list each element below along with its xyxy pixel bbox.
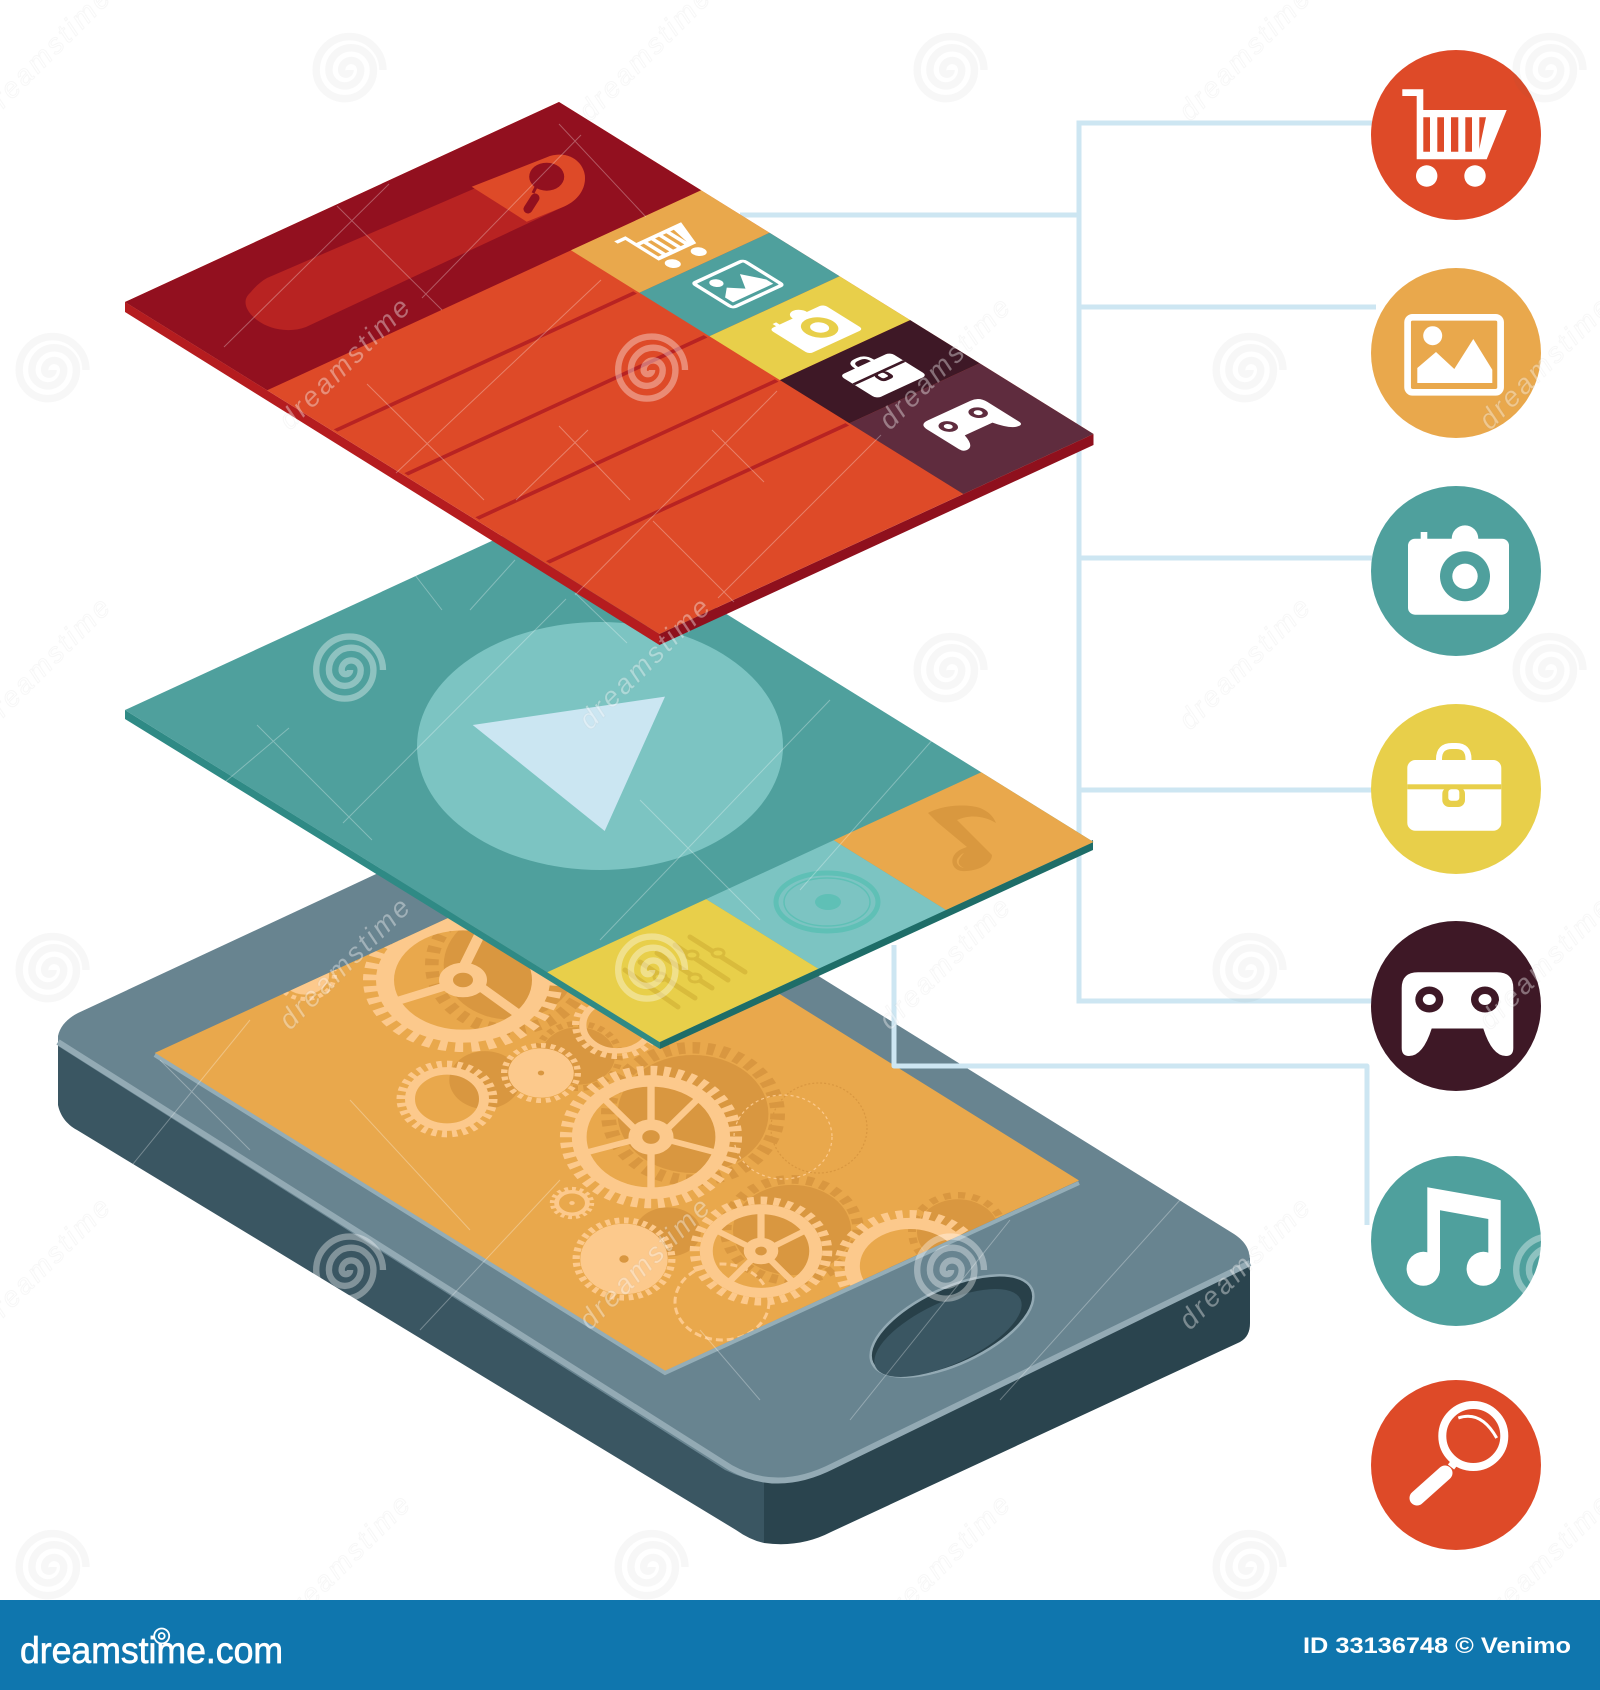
footer credit text: ID 33136748 © Venimo xyxy=(1303,1633,1571,1658)
teal panel right edge xyxy=(660,840,1093,1049)
icon: music note xyxy=(928,806,996,871)
phone screen xyxy=(155,862,1079,1371)
red panel left edge xyxy=(125,302,660,645)
phone rim highlight xyxy=(58,1042,1250,1481)
watermark text: dreamstime xyxy=(272,892,416,1035)
gear: solid lower xyxy=(576,1220,672,1298)
phone left side xyxy=(58,1036,764,1543)
red panel right edge xyxy=(660,434,1094,645)
icon: game controller on strip xyxy=(919,397,1023,452)
watermark text: dreamstime xyxy=(872,892,1016,1035)
gear: solid small xyxy=(504,1045,578,1101)
icon circle: picture xyxy=(1371,268,1541,438)
search bar xyxy=(246,155,585,330)
icon: picture on strip xyxy=(693,260,783,308)
icon circle: briefcase xyxy=(1371,704,1541,874)
smartphone xyxy=(58,800,1250,1544)
gear: large centre xyxy=(566,1071,736,1203)
teal panel left edge xyxy=(125,710,660,1049)
icon: briefcase on strip xyxy=(832,348,927,399)
footer logo text: dreamstime.com xyxy=(20,1630,283,1671)
watermark hairlines xyxy=(120,124,1180,1420)
gear: small fragment xyxy=(283,970,337,1001)
icon: magnifier in search bar xyxy=(528,163,564,209)
gear: large top xyxy=(371,914,555,1046)
watermark text: dreamstime xyxy=(872,1489,1016,1632)
red panel surface xyxy=(125,102,1093,634)
watermark text: dreamstime xyxy=(572,592,716,735)
icon: equalizer xyxy=(625,937,745,1007)
watermark text: dreamstime xyxy=(272,292,416,435)
icon circle: music note xyxy=(1371,1156,1541,1326)
icon: cart on strip xyxy=(614,216,721,273)
dashed construction circles xyxy=(675,1083,867,1340)
strip cells xyxy=(571,190,770,293)
watermark text: dreamstime xyxy=(272,1489,416,1632)
watermark text: dreamstime xyxy=(1172,592,1316,735)
dark background gears xyxy=(432,901,1004,1281)
footer bar xyxy=(0,1600,1600,1690)
connector lines: panel to icons xyxy=(740,123,1376,1001)
watermark text: dreamstime xyxy=(572,1192,716,1335)
watermark text: dreamstime xyxy=(872,292,1016,435)
connector: music icon xyxy=(894,945,1367,1225)
screen edge highlight xyxy=(155,1055,1079,1373)
icon: speaker xyxy=(776,873,878,931)
play button circle xyxy=(417,622,783,870)
teal panel surface xyxy=(125,510,1093,1042)
phone top face xyxy=(58,800,1250,1483)
list divider lines xyxy=(334,291,849,563)
icon circle: camera xyxy=(1371,486,1541,656)
gear: medium spoked xyxy=(695,1200,827,1302)
gear: ring small xyxy=(401,1064,493,1134)
gears on screen xyxy=(276,901,1004,1340)
red layer panel xyxy=(125,102,1093,645)
teal layer panel xyxy=(125,510,1093,1049)
footer logo spiral xyxy=(154,1628,169,1644)
phone right side xyxy=(764,1258,1250,1544)
home button xyxy=(856,1254,1048,1398)
icon circle: magnifier xyxy=(1371,1380,1541,1550)
icon circle: shopping cart xyxy=(1371,50,1541,220)
icon: camera on strip xyxy=(762,300,863,354)
play triangle xyxy=(473,697,665,831)
gear: tiny xyxy=(552,1189,592,1217)
gear: partial right xyxy=(834,1210,968,1288)
gear: top right under panel xyxy=(572,1004,654,1059)
watermark text: dreamstime xyxy=(1172,1192,1316,1335)
icon circle: game controller xyxy=(1371,921,1541,1091)
